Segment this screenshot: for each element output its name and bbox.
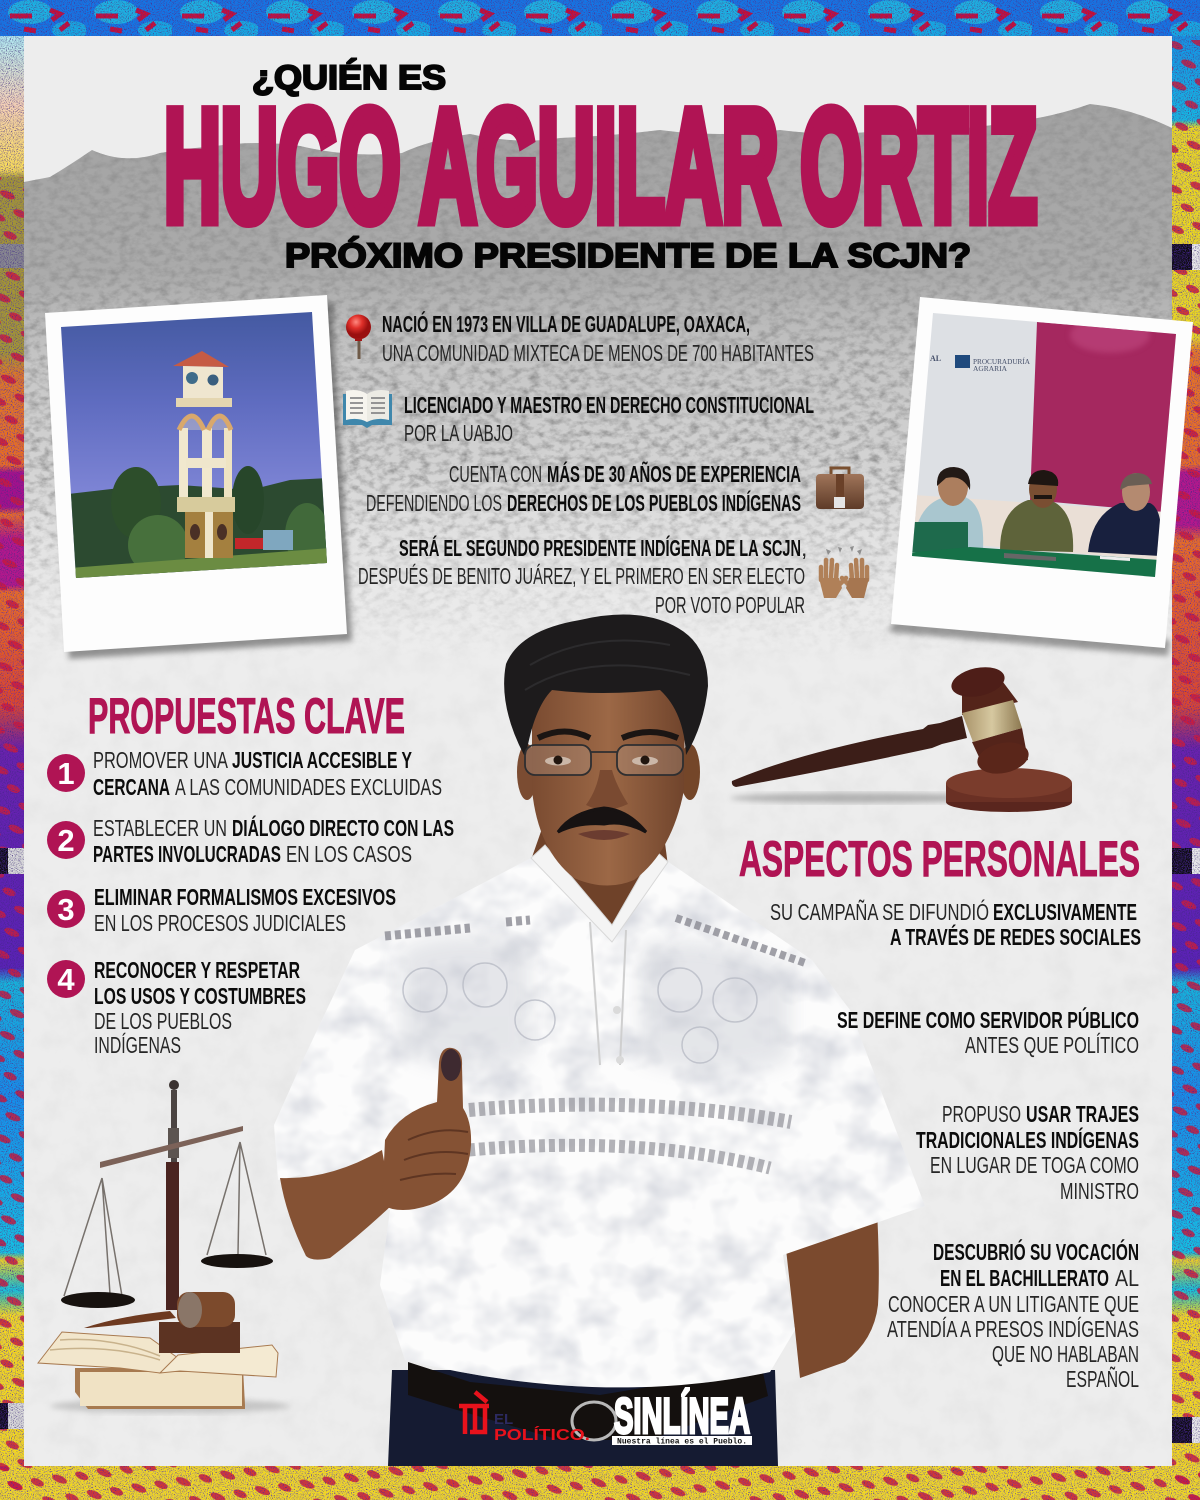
fact: experience: DERECHOS DE LOS PUEBLOS INDÍGENAS — [507, 489, 801, 516]
icon: open book — [343, 390, 392, 428]
proposal 4: RECONOCER Y RESPETAR — [94, 957, 300, 983]
open book — [38, 1332, 278, 1377]
aspect: public servant — [837, 1006, 1139, 1058]
nose shadow — [586, 770, 628, 810]
fact: birthplace — [382, 310, 814, 366]
proposal 2: PARTES INVOLUCRADAS — [93, 841, 281, 867]
aspect: traditional dress: PROPUSO — [942, 1101, 1021, 1127]
title line: próximo presidente: PRÓXIMO PRESIDENTE DE LA SCJN? — [285, 237, 971, 275]
belt — [408, 1362, 768, 1440]
aspect: vocation: ESPAÑOL — [1066, 1366, 1139, 1392]
aspect: campaign — [770, 899, 1141, 950]
book shadow — [50, 1399, 290, 1413]
photo: meeting table — [912, 313, 1176, 577]
proposal 1 — [47, 747, 442, 800]
proposal 4 — [47, 957, 306, 1058]
fact: indigenous president — [358, 534, 807, 618]
fact: education — [404, 392, 814, 446]
fact: experience: DEFENDIENDO LOS — [366, 490, 502, 516]
clock tower — [173, 351, 235, 558]
icon: briefcase — [816, 468, 864, 509]
fact: experience: CUENTA CON — [449, 461, 542, 487]
fact: indigenous president: , — [801, 535, 807, 561]
heading: propuestas clave: PROPUESTAS CLAVE — [88, 688, 405, 744]
title — [164, 59, 1037, 275]
placket and buttons — [590, 922, 626, 1065]
fact: experience: MÁS DE 30 AÑOS DE EXPERIENCIA — [547, 460, 801, 487]
proposal 3: EN LOS PROCESOS JUDICIALES — [94, 910, 346, 936]
aspect: vocation — [887, 1238, 1139, 1392]
illustration: scales of justice on books — [38, 1080, 290, 1413]
fact: birthplace: NACIÓ EN 1973 EN VILLA DE GUADALUPE, OAXACA, — [382, 310, 750, 337]
fact: birthplace: UNA COMUNIDAD MIXTECA DE MENOS DE 700 HABITANTES — [382, 340, 814, 366]
section: propuestas clave — [47, 688, 454, 1058]
proposal 4: DE LOS PUEBLOS — [94, 1008, 232, 1034]
proposal 2: ESTABLECER UN — [93, 815, 227, 841]
proposal 1: 1 — [57, 756, 75, 791]
lips — [578, 830, 630, 840]
gavel handle — [732, 716, 967, 787]
mustache — [558, 808, 646, 832]
aspect: traditional dress: USAR TRAJES — [1026, 1101, 1139, 1127]
sound block — [946, 768, 1072, 812]
proposal 4: INDÍGENAS — [94, 1032, 181, 1058]
proposal 1: CERCANA — [93, 774, 170, 800]
proposal 4: 4 — [57, 962, 75, 997]
photo: meeting table: AL — [930, 354, 941, 363]
jeans — [388, 1370, 778, 1466]
portrait: Hugo Aguilar Ortiz — [270, 615, 930, 1466]
aspect: vocation: AL — [1115, 1265, 1139, 1291]
photo: meeting table: PROCURADURÍA — [973, 356, 1031, 366]
gavel head — [949, 663, 1032, 778]
proposal 2: 2 — [57, 823, 75, 858]
logo: Sin Línea — [612, 1388, 752, 1446]
aspect: traditional dress — [916, 1101, 1139, 1204]
fact: indigenous president: DESPUÉS DE BENITO JUÁREZ, Y EL PRIMERO EN SER ELECTO — [358, 563, 805, 589]
aspect: campaign: SU CAMPAÑA SE DIFUNDIÓ — [770, 899, 989, 925]
photo: meeting table: AGRARIA — [973, 364, 1008, 373]
forearm and fist — [280, 1048, 471, 1260]
icon: raised hands — [819, 546, 869, 598]
proposal 2 — [47, 814, 454, 867]
eyes — [545, 756, 658, 766]
proposal 4: LOS USOS Y COSTUMBRES — [94, 983, 306, 1009]
embroidery rows — [385, 918, 808, 1168]
white shirt — [274, 858, 925, 1387]
proposal 1: A LAS COMUNIDADES EXCLUIDAS — [175, 774, 442, 800]
logo: Sin Línea: SINLÍNEA — [614, 1388, 750, 1444]
fact: education: LICENCIADO Y MAESTRO EN DERECHO CONSTITUCIONAL — [404, 392, 814, 418]
section: aspectos personales — [739, 831, 1141, 1392]
scale post — [166, 1080, 179, 1310]
proposal 1: PROMOVER UNA — [93, 747, 228, 773]
photo: clock tower — [61, 312, 327, 578]
proposal 3 — [47, 884, 396, 936]
logo: El Político — [459, 1392, 590, 1444]
proposal 1: JUSTICIA ACCESIBLE Y — [232, 747, 412, 773]
closed book — [75, 1368, 245, 1409]
shirt shading — [270, 850, 930, 1410]
gavel on block — [730, 663, 1072, 812]
neck — [531, 820, 668, 942]
logo: Sin Línea: Nuestra línea es el Pueblo. — [617, 1438, 747, 1446]
aspect: vocation: EN EL BACHILLERATO — [940, 1265, 1109, 1291]
title line: ¿Quién es: ¿QUIÉN ES — [252, 59, 446, 97]
proposal 3: 3 — [57, 892, 75, 927]
gavel shadow — [730, 793, 990, 803]
glasses — [525, 745, 683, 775]
small gavel — [84, 1292, 240, 1353]
scale chains — [64, 1142, 266, 1296]
aspect: campaign: EXCLUSIVAMENTE — [993, 899, 1137, 925]
collar — [531, 845, 668, 942]
hair — [504, 615, 708, 755]
fact: experience — [366, 460, 801, 516]
polaroid: clock tower — [45, 295, 352, 659]
aspect: traditional dress: MINISTRO — [1060, 1178, 1139, 1204]
fact: indigenous president: POR VOTO POPULAR — [655, 592, 805, 618]
lace medallions on chest — [403, 963, 757, 1063]
fact: education: POR LA UABJO — [404, 420, 513, 446]
proposal 2: DIÁLOGO DIRECTO CON LAS — [232, 814, 454, 841]
logo: El Político: POLÍTICO. — [494, 1425, 590, 1444]
scale pans — [61, 1254, 273, 1308]
icon: red pushpin — [346, 314, 371, 359]
polaroid: meeting photo — [888, 297, 1193, 656]
hair highlights — [525, 640, 690, 690]
proposal 3: ELIMINAR FORMALISMOS EXCESIVOS — [94, 884, 396, 910]
scale beam — [100, 1126, 243, 1168]
right arm — [785, 1210, 879, 1378]
brows — [538, 732, 678, 738]
face — [517, 675, 700, 886]
logo: El Político: EL — [494, 1411, 513, 1428]
proposal 2: EN LOS CASOS — [286, 841, 412, 867]
fact: indigenous president: SERÁ EL SEGUNDO PRESIDENTE INDÍGENA DE LA SCJN — [399, 534, 801, 561]
fact block — [343, 310, 869, 618]
